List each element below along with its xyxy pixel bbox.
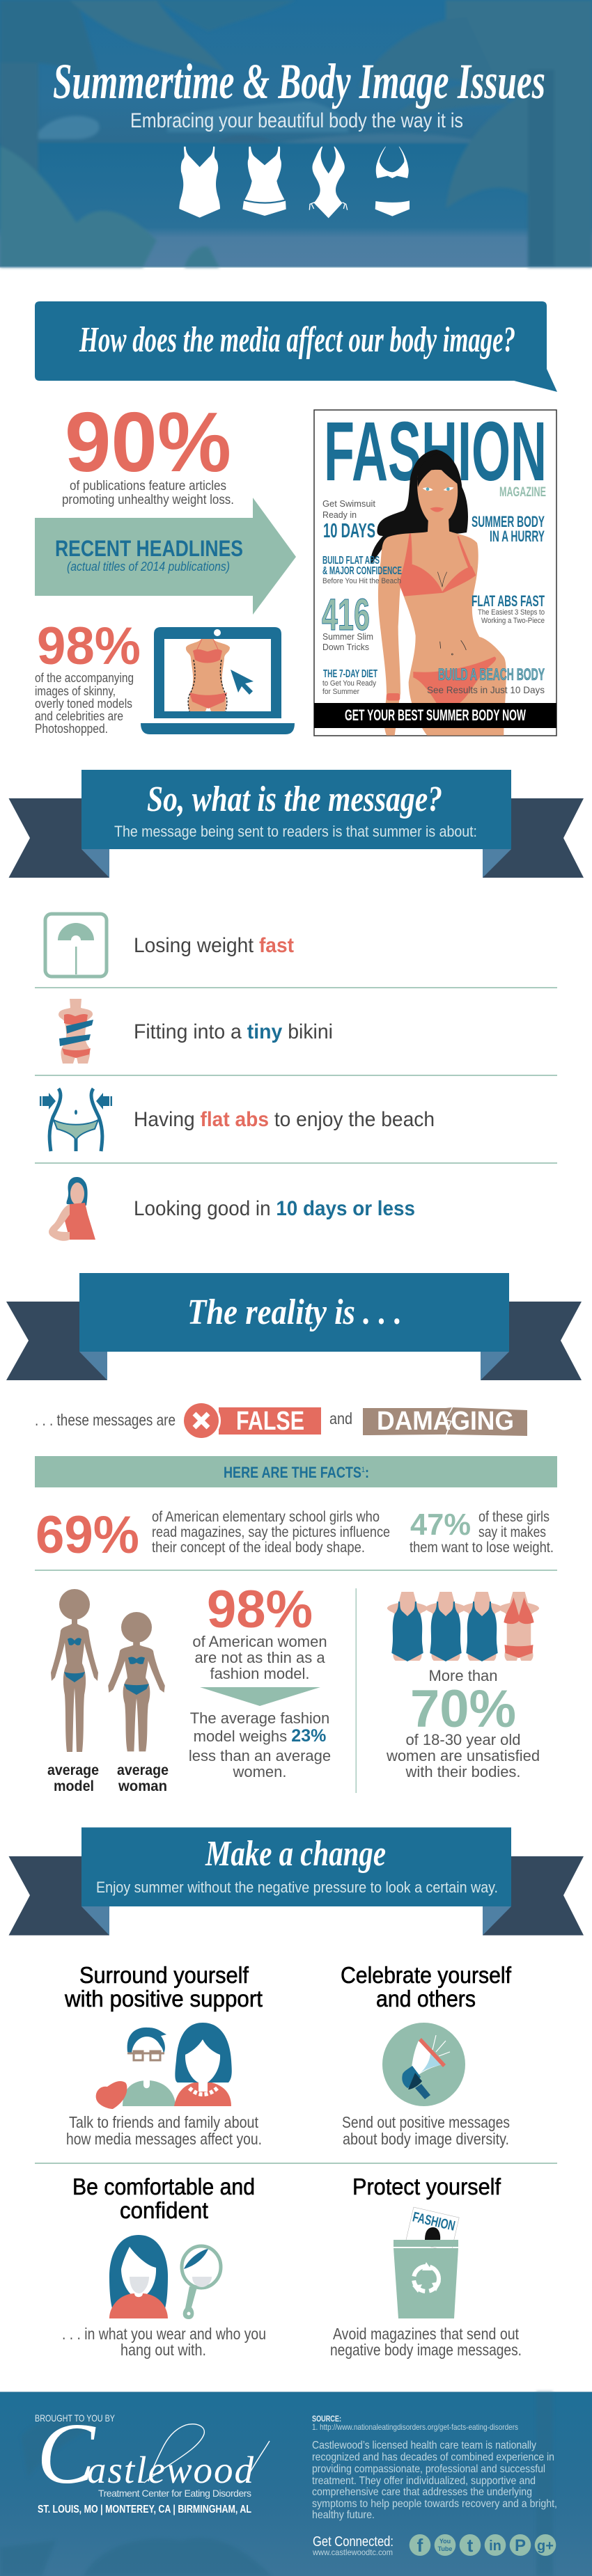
stat: 98% American women: less than an average: [189, 1747, 331, 1764]
stat: 69%: read magazines, say the pictures influence: [152, 1524, 390, 1540]
cover black bar: [314, 703, 556, 728]
tip: celebrate yourself: Send out positive messages: [342, 2113, 510, 2131]
badge: false: FALSE: [236, 1407, 304, 1436]
stat: 98% American women: model weighs 23%: [194, 1726, 326, 1746]
arrow: recent headlines: RECENT HEADLINES: [55, 536, 243, 561]
arrow: recent headlines: [35, 498, 296, 615]
ribbon: the reality is: [6, 1273, 582, 1380]
about text: healthy future.: [312, 2509, 375, 2521]
cover lines left: for Summer: [322, 688, 359, 696]
stat: 98% American women: women.: [232, 1763, 287, 1780]
stat: 98% American women: [189, 1580, 331, 1780]
logo: Castlewood: C: [37, 2406, 96, 2502]
ribbon: so, what is the message: The message being sent to readers is that summer is about:: [114, 823, 477, 840]
tip: be comfortable: confident: [120, 2197, 208, 2223]
stat: 70%: with their bodies.: [405, 1763, 521, 1780]
about text: Castlewood’s licensed health care team is nationally: [312, 2440, 536, 2451]
stat: 70%: 70%: [410, 1680, 516, 1739]
tip: surround yourself: Surround yourself: [79, 1962, 249, 1988]
stat: 69%: of American elementary school girls who: [152, 1509, 380, 1525]
cover lines left: to Get You Ready: [322, 679, 376, 688]
icon: laptop: [141, 627, 295, 734]
cover lines right: [427, 513, 545, 695]
cover lines left: & MAJOR CONFIDENCE: [322, 565, 402, 577]
false and damaging line: and: [329, 1409, 352, 1428]
message: ten days: Looking good in 10 days or less: [134, 1197, 415, 1220]
ribbon: make a change: Enjoy summer without the negative pressure to look a certain way.: [96, 1879, 498, 1896]
message: tiny bikini: Fitting into a tiny bikini: [134, 1020, 333, 1043]
icon: swimsuits: [179, 147, 410, 218]
stat: 69%: [36, 1506, 390, 1565]
figure: average woman: [108, 1612, 165, 1751]
figure labels: [47, 1762, 169, 1794]
facts bar: 1: [361, 1466, 365, 1474]
get connected: [312, 2534, 394, 2557]
stat: 98% photoshopped: 98%: [37, 617, 141, 676]
tip: be comfortable: [62, 2174, 266, 2359]
icon: megaphone: [382, 2023, 465, 2106]
arrow: recent headlines: (actual titles of 2014 publications): [67, 560, 230, 574]
stat: 69%: their concept of the ideal body shape.: [152, 1540, 365, 1556]
cover lines left: Before You Hit the Beach: [322, 577, 401, 585]
tip: celebrate yourself: and others: [376, 1986, 476, 2012]
icon: four torsos in swimwear: [387, 1592, 539, 1661]
stat: 70%: [386, 1667, 540, 1780]
about text: symptoms to help people towards recovery and a bright,: [312, 2498, 557, 2510]
stat: 98% American women: 98%: [207, 1580, 313, 1639]
tip: surround yourself: how media messages affect you.: [66, 2130, 262, 2148]
icon: friends: [96, 2023, 232, 2109]
facts bar: [35, 1456, 557, 1487]
figure labels: woman: [118, 1778, 167, 1794]
false and damaging line: . . . these messages are: [35, 1411, 176, 1429]
cover lines left: 416: [322, 590, 370, 640]
social icons: g+: [537, 2538, 554, 2554]
cover lines left: [322, 498, 402, 696]
stat: 47%: [410, 1508, 554, 1556]
icon: recycle bin with magazine: FASHION: [411, 2209, 457, 2234]
false and damaging line: [35, 1401, 527, 1440]
tip: surround yourself: [64, 1962, 263, 2148]
stat: 98% American women: fashion model.: [210, 1665, 310, 1682]
facts bar: HERE ARE THE FACTS: [224, 1464, 391, 1481]
ribbon: so, what is the message: [8, 770, 584, 878]
stat: 69%: 69%: [36, 1506, 139, 1565]
about text: [312, 2440, 557, 2521]
cover lines left: BUILD FLAT ABS: [322, 555, 380, 567]
source: 1. http://www.nationaleatingdisorders.org/get-facts-eating-disorders: [312, 2422, 518, 2432]
social icons: t: [467, 2535, 474, 2556]
social icons: You: [439, 2538, 451, 2545]
tip: be comfortable: . . . in what you wear and who you: [62, 2325, 266, 2343]
cover lines left: Down Tricks: [322, 642, 369, 652]
stat: 98% American women: of American women: [192, 1633, 327, 1650]
cover lines right: SUMMER BODY: [472, 513, 545, 530]
stat: 98% American women: are not as thin as a: [194, 1649, 325, 1666]
badge: false: [182, 1401, 321, 1440]
figure labels: model: [54, 1778, 94, 1794]
icon: flat abs waist: [40, 1089, 112, 1151]
subtitle: Embracing your beautiful body the way it is: [130, 109, 463, 132]
icon: woman in swimsuit: [49, 1177, 95, 1241]
cover lines right: FLAT ABS FAST: [472, 592, 545, 610]
about text: treatment. They offer individualized, supportive and: [312, 2475, 536, 2487]
message: losing weight: Losing weight fast: [134, 934, 294, 957]
social icons: [410, 2534, 556, 2556]
stat: 47%: of these girls: [478, 1509, 550, 1525]
stat: 98% photoshopped: overly toned models: [35, 697, 132, 711]
beach background: [0, 0, 592, 267]
logo: Castlewood: ST. LOUIS, MO | MONTEREY, CA | BIRMINGHAM, AL: [38, 2504, 251, 2515]
social icons: f: [417, 2535, 423, 2556]
tip: protect yourself: Protect yourself: [352, 2174, 501, 2199]
stat: 98% photoshopped: and celebrities are: [35, 709, 123, 723]
tip: celebrate yourself: [341, 1962, 512, 2148]
icon: bikini torso with tape: [59, 999, 93, 1064]
about text: comprehensive care that addresses the underlying: [312, 2486, 532, 2498]
icon: scale: [45, 914, 107, 977]
stat: 90%: of publications feature articles: [70, 479, 226, 493]
figure labels: average: [117, 1762, 169, 1778]
icon: woman and mirror: [109, 2235, 221, 2319]
figure labels: average: [47, 1762, 99, 1778]
cover lines right: The Easiest 3 Steps to: [478, 608, 545, 617]
tip: celebrate yourself: Celebrate yourself: [341, 1962, 512, 1988]
magazine cover: [314, 404, 556, 736]
speech bubble heading: [35, 301, 557, 392]
cover lines left: THE 7-DAY DIET: [323, 668, 377, 680]
stat: 47%: them want to lose weight.: [410, 1540, 554, 1556]
stat: 70%: women are unsatisfied: [386, 1747, 540, 1764]
badge: damaging: DAMAGING: [377, 1407, 514, 1436]
stat: 70%: More than: [428, 1667, 498, 1684]
stat: 90%: 90%: [65, 395, 231, 489]
message: flat abs: Having flat abs to enjoy the beach: [134, 1108, 435, 1131]
tip: surround yourself: with positive support: [64, 1986, 263, 2012]
stat: 70%: of 18-30 year old: [405, 1731, 521, 1748]
cover lines right: See Results in Just 10 Days: [427, 684, 545, 695]
cover lines left: Ready in: [322, 509, 357, 520]
tip: protect yourself: negative body image messages.: [330, 2341, 522, 2359]
stat: 47%: 47%: [410, 1508, 471, 1542]
tip: surround yourself: Talk to friends and family about: [69, 2113, 259, 2131]
get connected: Get Connected:: [313, 2534, 394, 2550]
about text: recognized and has decades of combined experience in: [312, 2451, 554, 2463]
stat: 98% photoshopped: Photoshopped.: [35, 722, 108, 736]
source: [312, 2414, 518, 2432]
footer: [0, 2392, 592, 2576]
stat: 47%: say it makes: [478, 1524, 546, 1540]
cover lines right: Working a Two-Piece: [481, 617, 545, 625]
tip: be comfortable: hang out with.: [120, 2341, 206, 2359]
brought to you by: BROUGHT TO YOU BY: [35, 2412, 116, 2424]
source: SOURCE:: [312, 2414, 341, 2424]
cover lines left: Summer Slim: [322, 631, 373, 642]
ribbon: so, what is the message: So, what is the message?: [147, 780, 442, 819]
figure: average model: [51, 1589, 98, 1752]
ribbon: make a change: Make a change: [205, 1834, 386, 1874]
stat: 98% American women: The average fashion: [190, 1709, 329, 1727]
stat: 98% photoshopped: of the accompanying: [35, 671, 134, 685]
get connected: www.castlewoodtc.com: [312, 2547, 393, 2557]
icon: recycle bin with magazine: [394, 2207, 459, 2318]
ribbon: make a change: [8, 1828, 584, 1935]
tip: protect yourself: Avoid magazines that send out: [333, 2325, 520, 2343]
stat: 90%: promoting unhealthy weight loss.: [62, 493, 234, 507]
tip: protect yourself: [330, 2174, 522, 2359]
illustration: cover model: [371, 450, 506, 736]
logo: Castlewood: astlewood: [87, 2449, 255, 2491]
social icons: in: [489, 2538, 501, 2554]
logo: Castlewood: Treatment Center for Eating Disorders: [98, 2488, 251, 2499]
stat: 98% photoshopped: images of skinny,: [35, 684, 116, 698]
cover lines left: Get Swimsuit: [322, 498, 375, 509]
cover lines right: IN A HURRY: [490, 528, 545, 545]
facts bar: :: [365, 1464, 369, 1481]
tip: be comfortable: Be comfortable and: [72, 2174, 255, 2199]
header banner: [0, 0, 592, 267]
tip: celebrate yourself: about body image diversity.: [343, 2130, 509, 2148]
logo: Castlewood: [37, 2406, 270, 2515]
social icons: Tube: [438, 2545, 452, 2552]
stat: 98% photoshopped: [35, 617, 141, 736]
cover lines left: 10 DAYS: [323, 520, 375, 542]
about text: providing compassionate, professional and successful: [312, 2463, 545, 2475]
magazine cover: MAGAZINE: [499, 485, 546, 500]
social icons: P: [515, 2536, 526, 2555]
ribbon: the reality is: The reality is . . .: [187, 1293, 402, 1332]
